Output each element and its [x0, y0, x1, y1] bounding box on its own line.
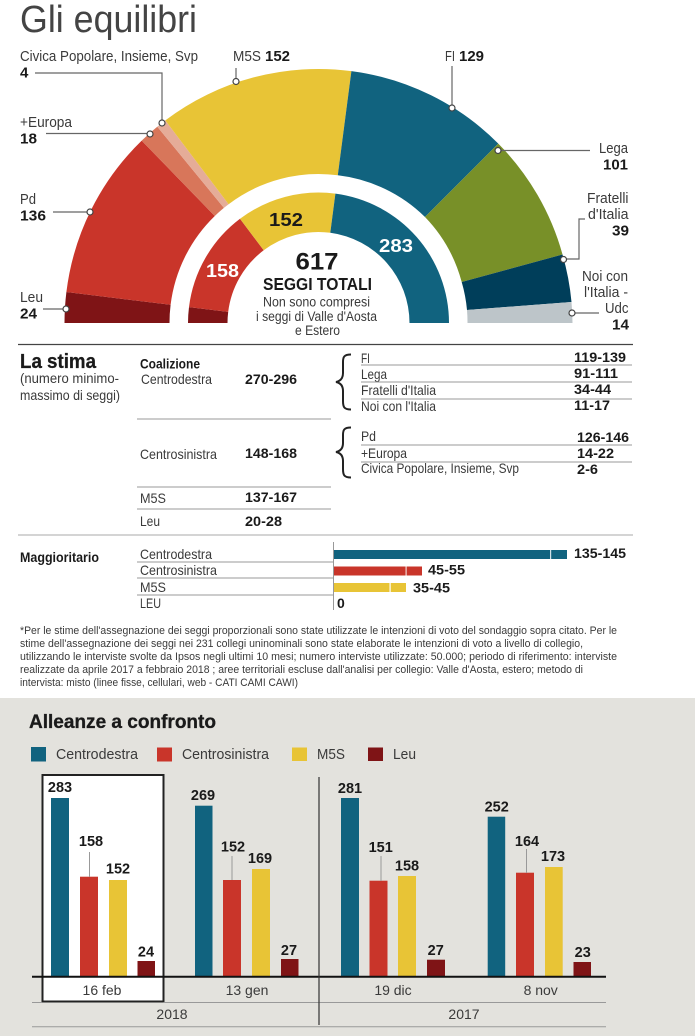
group: 13 gen: 27	[281, 943, 297, 959]
row labels: LEU	[140, 595, 161, 611]
panel: La stima	[20, 349, 632, 529]
legend: Centrosinistra	[182, 747, 270, 763]
label: Noi con l'Italia: Udc	[605, 300, 629, 317]
table: centrosinistra parties: Pd	[361, 428, 376, 444]
label: Pd: 136	[20, 208, 46, 224]
table: centrodestra parties: Lega	[361, 366, 387, 382]
year labels: 2018	[156, 1006, 188, 1022]
group: 19 dic: 158	[395, 859, 419, 875]
group: 19 dic: 281	[338, 781, 362, 797]
label: Lega: 101	[603, 156, 628, 174]
group: 13 gen: 169	[248, 851, 272, 867]
title: Gli equilibri	[20, 0, 197, 41]
center total: 617	[296, 248, 338, 276]
footnote	[20, 625, 617, 689]
table: centrodestra parties: 34-44	[574, 381, 611, 397]
panel: Maggioritario	[20, 542, 626, 611]
group: 16 feb: 16 feb	[83, 982, 122, 998]
label: M5S: 152	[265, 48, 290, 65]
label: Civica Popolare: 4	[20, 64, 29, 82]
inner ring values: 283	[379, 235, 413, 256]
label: FI	[445, 48, 484, 111]
label: Fratelli d'Italia	[560, 190, 629, 262]
label: +Europa: 18	[20, 130, 37, 148]
table: coalizioni: Coalizione	[140, 356, 200, 372]
group: 19 dic: 27	[428, 943, 444, 959]
table: coalizioni: 20-28	[245, 513, 282, 529]
bar: Centrosinistra: 45-55	[428, 562, 465, 578]
bar: LEU: 0	[337, 595, 345, 611]
center total: SEGGI TOTALI	[263, 274, 372, 294]
group: 8 nov: 8 nov	[524, 982, 558, 998]
panel: Alleanze a confronto	[0, 698, 695, 1036]
label: Leu: 24	[20, 306, 38, 322]
bar: Centrodestra: 135-145	[574, 545, 626, 561]
table: centrodestra parties	[361, 349, 632, 414]
inner ring values: 158	[206, 260, 239, 281]
group: 8 nov: 252	[485, 800, 509, 816]
inner ring values: 152	[269, 209, 303, 230]
legend: Centrodestra	[56, 747, 139, 763]
label: Noi con l'Italia: l'Italia -	[584, 284, 628, 301]
label: +Europa: +Europa	[20, 114, 73, 131]
inner ring values	[206, 209, 413, 281]
group: 13 gen	[191, 788, 298, 998]
table: coalizioni: 270-296	[245, 371, 297, 387]
footnote: utilizzando le interviste svolte da Ipsos negli ultimi 10 mesi; numero interviste utilizzate: 50.000; periodo di riferimento: interviste	[20, 651, 617, 663]
heading: La stima: La stima	[20, 351, 97, 373]
row labels	[137, 546, 333, 611]
brace: centrodestra	[336, 354, 351, 410]
row labels: M5S	[140, 579, 166, 595]
table: centrosinistra parties	[361, 428, 632, 477]
table: coalizioni: Centrosinistra	[140, 446, 217, 462]
heading: La stima: massimo di seggi)	[20, 387, 120, 403]
group: 16 feb	[48, 780, 155, 998]
label: Noi con l'Italia: Noi con	[582, 268, 628, 285]
label: FI: 129	[459, 48, 484, 65]
heading: La stima: (numero minimo-	[20, 370, 119, 386]
label: Fratelli d'Italia: Fratelli	[587, 190, 628, 207]
footnote: *Per le stime dell'assegnazione dei seggi proporzionali sono state utilizzate le intenzioni di voto del sondaggio sopra citato. Per le	[20, 625, 617, 637]
year labels	[156, 1006, 480, 1022]
table: coalizioni: Centrodestra	[141, 371, 212, 387]
group: 19 dic	[338, 781, 445, 998]
table: centrodestra parties: 119-139	[574, 349, 626, 365]
group: 13 gen: 269	[191, 788, 215, 804]
label: Noi con l'Italia: 14	[612, 316, 630, 334]
table: coalizioni: Leu	[140, 513, 160, 529]
table: centrodestra parties: 11-17	[574, 397, 610, 413]
group: 8 nov: 23	[575, 945, 591, 961]
group: 16 feb: 152	[106, 862, 130, 878]
group: 19 dic: 19 dic	[374, 982, 412, 998]
label: Pd: Pd	[20, 191, 36, 208]
label: +Europa	[20, 114, 153, 148]
center total	[256, 248, 377, 338]
group: 8 nov	[485, 800, 591, 998]
group: 13 gen: 152	[221, 840, 245, 856]
bar: Centrosinistra	[334, 562, 465, 578]
bar: Centrodestra	[334, 545, 626, 561]
group: 8 nov: 164	[515, 834, 539, 850]
legend: Leu	[393, 747, 416, 763]
table: centrodestra parties: Fratelli d'Italia	[361, 382, 436, 398]
table: centrosinistra parties: 14-22	[577, 445, 614, 461]
heading: Alleanze a confronto	[29, 712, 216, 733]
brace: centrosinistra	[336, 428, 351, 478]
label: Fratelli d'Italia: 39	[612, 222, 629, 240]
chart: hemicycle seats	[64, 69, 572, 338]
label: Lega: Lega	[599, 140, 629, 157]
panel: Maggioritario: Maggioritario	[20, 550, 99, 565]
table: centrosinistra parties: 126-146	[577, 429, 629, 445]
center total: e Estero	[295, 323, 340, 338]
table: centrosinistra parties: +Europa	[361, 445, 407, 461]
label: Fratelli d'Italia: d'Italia	[588, 206, 629, 223]
year labels: 2017	[448, 1006, 480, 1022]
legend	[31, 747, 416, 763]
group: 19 dic: 151	[369, 840, 393, 856]
label: Leu: Leu	[20, 289, 43, 306]
outer ring: parties	[64, 69, 572, 323]
table: centrodestra parties: 91-111	[574, 365, 618, 381]
group: 16 feb: 283	[48, 780, 72, 796]
bar: M5S: 35-45	[413, 580, 450, 596]
group: 16 feb: 158	[79, 834, 103, 850]
label: Civica Popolare	[20, 48, 198, 126]
group: 13 gen: 13 gen	[226, 982, 268, 998]
label: M5S	[233, 48, 290, 84]
center total: Non sono compresi	[263, 294, 370, 310]
legend: M5S	[317, 747, 345, 763]
heading: La stima	[20, 351, 120, 403]
bar: M5S	[334, 580, 450, 596]
table: centrodestra parties: Noi con l'Italia	[361, 398, 436, 414]
footnote: stime dell'assegnazione dei seggi nei 231 collegi uninominali sono state elaborate le intenzioni di voto a livello di collegio,	[20, 638, 583, 650]
row labels: Centrodestra	[140, 546, 212, 562]
table: coalizioni: M5S	[140, 490, 166, 506]
table: coalizioni: 148-168	[245, 445, 297, 461]
table: coalizioni	[137, 356, 331, 529]
table: coalizioni: 137-167	[245, 489, 297, 505]
inner ring: coalitions	[188, 193, 449, 323]
label: Lega	[495, 140, 629, 174]
label: M5S: M5S	[233, 48, 261, 65]
group: 8 nov: 173	[541, 849, 565, 865]
label: Leu	[20, 289, 69, 322]
table: centrosinistra parties: 2-6	[577, 461, 598, 477]
center total: i seggi di Valle d'Aosta	[256, 309, 377, 324]
footnote: intervista: misto (linee fisse, cellulari, web - CATI CAMI CAWI)	[20, 677, 298, 689]
label: Noi con l'Italia	[569, 268, 630, 334]
row labels: Centrosinistra	[140, 562, 217, 578]
label: Civica Popolare: Civica Popolare, Insieme, Svp	[20, 48, 198, 65]
label: FI: FI	[445, 48, 455, 65]
table: centrosinistra parties: Civica Popolare, Insieme, Svp	[361, 460, 519, 476]
footnote: realizzate da aprile 2017 a febbraio 2018 ; aree territoriali escluse dall'analisi per collegio: Valle d'Aosta, estero; metodo di	[20, 664, 583, 676]
highlight box: 16 feb	[42, 775, 164, 1002]
table: centrodestra parties: FI	[361, 350, 370, 366]
group: 16 feb: 24	[138, 945, 154, 961]
label: Pd	[20, 191, 93, 224]
